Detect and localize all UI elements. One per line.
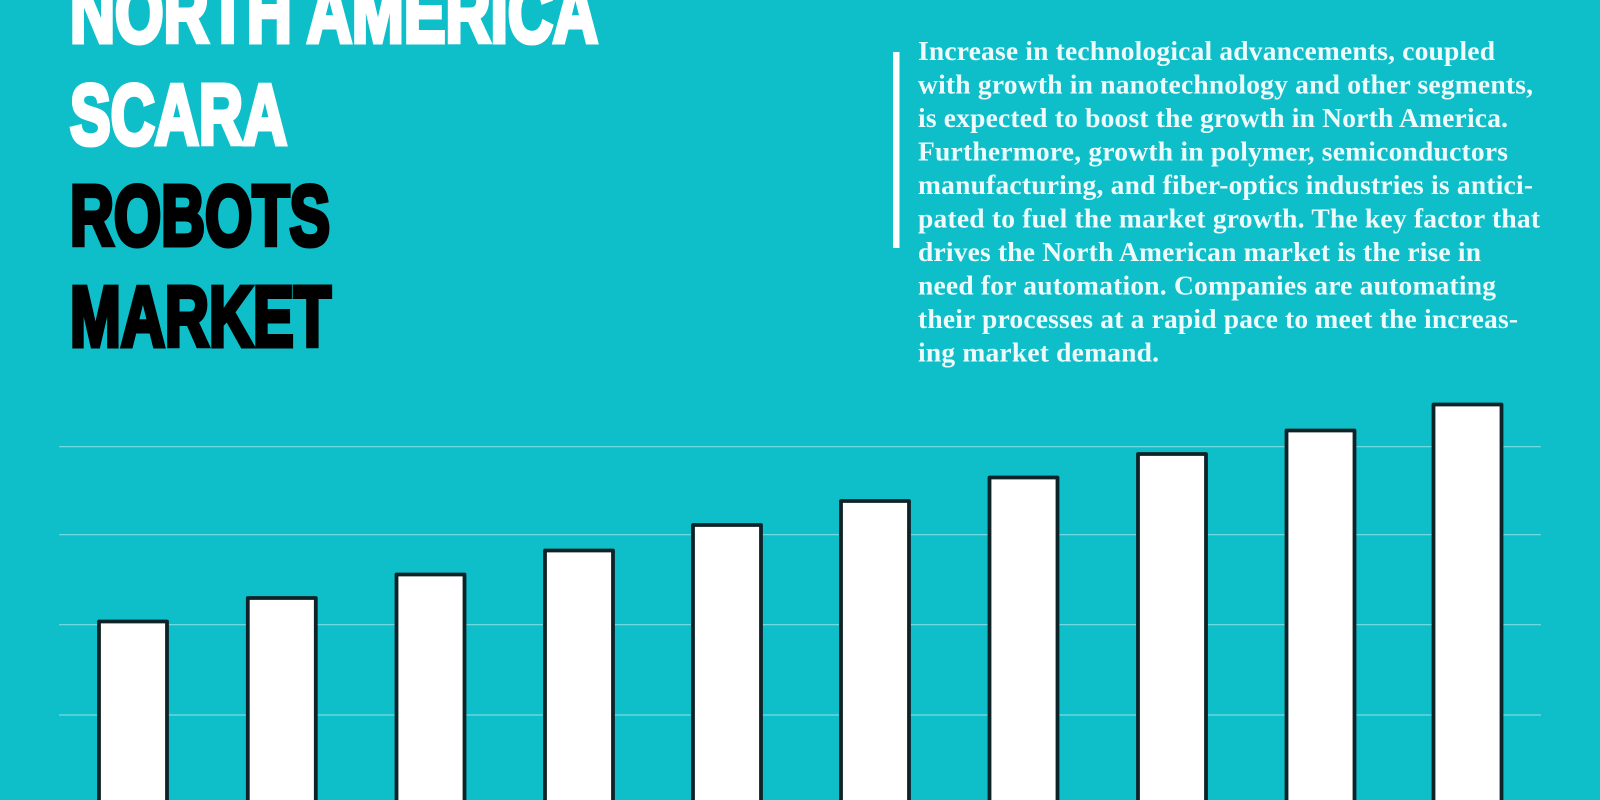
description text block: Furthermore, growth in polymer, semiconductors <box>918 136 1508 166</box>
description text block: Increase in technological advancements, coupled <box>918 35 1495 66</box>
description text block: ing market demand. <box>918 336 1159 368</box>
description text block: with growth in nanotechnology and other segments, <box>918 68 1533 100</box>
description text block <box>918 35 1541 368</box>
bar chart <box>59 404 1541 800</box>
description text block: is expected to boost the growth in North America. <box>918 102 1508 133</box>
description text block: need for automation. Companies are automating <box>918 270 1496 300</box>
title: ROBOTS <box>70 169 330 264</box>
title <box>70 0 598 365</box>
title: MARKET <box>70 270 331 365</box>
description text block: their processes at a rapid pace to meet the increas- <box>918 303 1518 334</box>
chart bars <box>99 404 1502 800</box>
chart gridlines <box>59 447 1541 715</box>
description text block: manufacturing, and fiber-optics industries is antici- <box>918 169 1533 200</box>
description text block: pated to fuel the market growth. The key factor that <box>918 202 1541 234</box>
accent bar beside description <box>893 52 900 248</box>
description text block: drives the North American market is the rise in <box>918 236 1481 267</box>
title: SCARA <box>70 68 287 163</box>
